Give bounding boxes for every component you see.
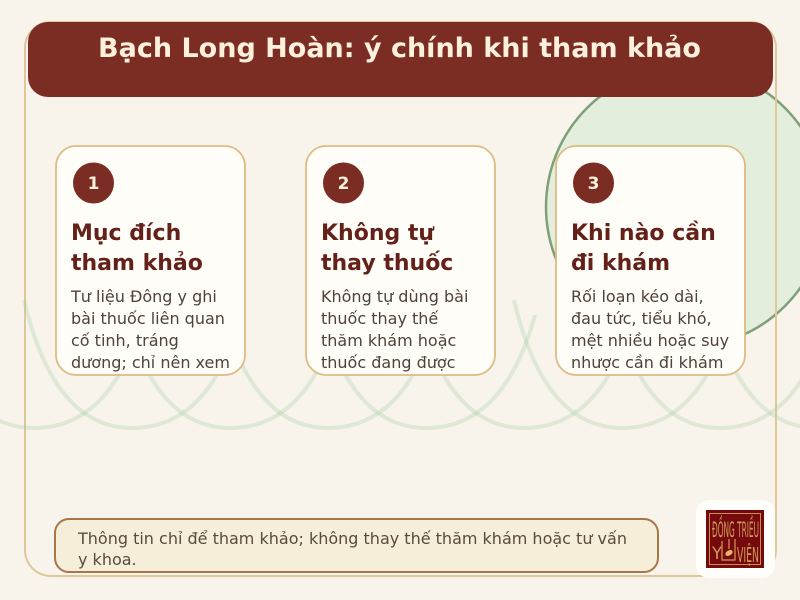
card 1 body: bài thuốc liên quan (71, 309, 225, 328)
panel: card 2 (306, 146, 495, 375)
logo: VIỆN (737, 543, 759, 567)
card 1 body: Tư liệu Đông y ghi (70, 287, 217, 306)
card 3 body: đau tức, tiểu khó, (571, 309, 712, 328)
title: Bạch Long Hoàn: ý chính khi tham khảo (98, 33, 701, 64)
card 2 body: thăm khám hoặc (321, 331, 456, 350)
disclaimer callout (55, 519, 658, 572)
card 1 body: cố tinh, tráng (71, 331, 179, 350)
decorative green circle (546, 67, 800, 347)
card 3 body: nhược cần đi khám (571, 353, 723, 372)
number badge 3 (573, 162, 614, 204)
panel: card 1 (56, 146, 245, 375)
number badge 1: 1 (88, 174, 99, 194)
panel: card 3 (556, 146, 745, 375)
number badge 1 (73, 162, 114, 204)
card 2 body: thuốc thay thế (321, 309, 438, 328)
number badge 2: 2 (338, 174, 349, 194)
disclaimer callout: Thông tin chỉ để tham khảo; không thay thế thăm khám hoặc tư vấn (77, 529, 627, 548)
card 1 body: dương; chỉ nên xem (71, 353, 230, 372)
card 3 body: mệt nhiều hoặc suy (571, 331, 729, 350)
disclaimer callout: y khoa. (78, 550, 137, 569)
card 2 body: thuốc đang được (321, 353, 455, 372)
number badge 2 (323, 162, 364, 204)
card 2 heading: thay thuốc (321, 251, 453, 276)
header banner (28, 22, 773, 97)
card 3 heading: đi khám (571, 251, 670, 276)
card 3 body: Rối loạn kéo dài, (571, 287, 704, 306)
wave pattern (0, 300, 800, 428)
card 2 body: Không tự dùng bài (321, 287, 468, 306)
card 1 heading: tham khảo (71, 251, 203, 276)
card 2 heading: Không tự (321, 221, 435, 246)
logo: Y (711, 544, 723, 564)
number badge 3: 3 (588, 174, 599, 194)
card 3 heading: Khi nào cần (571, 221, 716, 246)
card 1 heading: Mục đích (71, 221, 181, 246)
logo (696, 500, 775, 578)
